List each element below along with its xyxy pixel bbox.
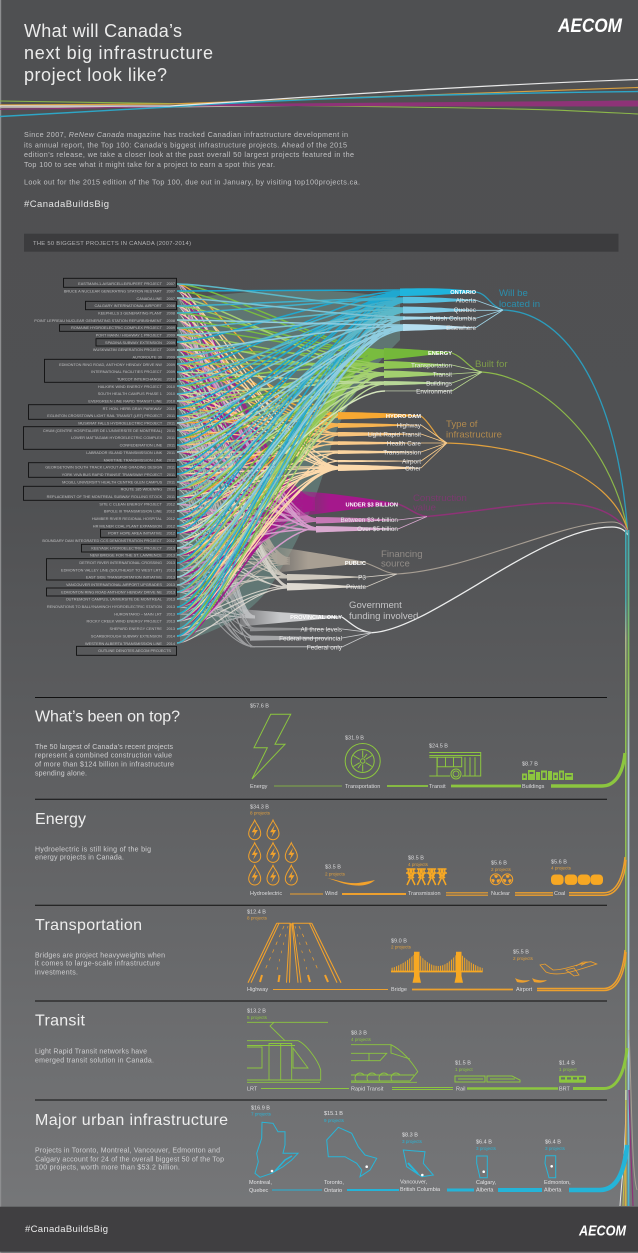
value labels [249, 1105, 571, 1194]
project list: SITE C CLEAN ENERGY PROJECT 2012 [99, 502, 175, 506]
value labels: Ontario [324, 1188, 342, 1194]
value labels: $13.2 B [247, 1009, 266, 1015]
value labels: Bridge [391, 987, 407, 993]
right edge bundle of lines [620, 530, 637, 1206]
value labels: $16.9 B [251, 1105, 270, 1111]
flow labels: ENERGY [428, 351, 452, 357]
project counts: 2 projects [391, 945, 412, 950]
panel: what's been on top [35, 704, 625, 790]
value labels: $6.4 B [476, 1139, 492, 1145]
description: 100 projects, worth more than $53.2 billion. [35, 1165, 180, 1172]
heading: Transit [35, 1013, 86, 1030]
flow category headings: source [381, 558, 410, 570]
logo: AECOM: AECOM [557, 15, 623, 37]
project list: EASTMAIN-1-A/SARCELLE/RUPERT PROJECT 2007 [78, 282, 175, 286]
panel: energy [35, 805, 626, 897]
value labels: Buildings [522, 784, 545, 790]
flow labels: PUBLIC [345, 561, 366, 567]
value labels: Quebec [249, 1188, 269, 1194]
description: investments. [35, 969, 78, 976]
description: Light Rapid Transit networks have [35, 1048, 147, 1055]
hub connector lines to the right edge [342, 292, 628, 647]
value labels: Alberta [544, 1188, 562, 1194]
value labels: $8.3 B [351, 1031, 367, 1037]
icon: BRT bus [559, 1076, 586, 1083]
title: project look like? [24, 65, 167, 85]
value labels: $3.5 B [325, 865, 341, 871]
project list: EDMONTON RING ROAD ANTHONY HENDAY DRIVE NE 2013 [61, 590, 175, 594]
project list: SOUTH HEALTH CAMPUS PHASE 1 2010 [98, 392, 175, 396]
mesh of flow lines: location (blue) [177, 284, 405, 643]
footer hashtag: #CanadaBuildsBig [25, 1224, 108, 1235]
flow category headings: Will be [499, 288, 528, 299]
value labels [250, 805, 567, 897]
value labels: $15.1 B [324, 1111, 343, 1117]
mesh of flow lines: built for (green) [177, 284, 385, 643]
project list: AUTOROUTE 30 2009 [133, 356, 175, 360]
project counts: 3 projects [545, 1146, 566, 1151]
project list: CHUM (CENTRE HOSPITALIER DE L’UNIVERSITE DE MONTREAL) 2011 [43, 429, 175, 433]
title: next big infrastructure [24, 43, 213, 63]
flow ribbons: financing source [277, 547, 366, 590]
value labels: $6.4 B [545, 1139, 561, 1145]
project counts: 9 projects [324, 1118, 345, 1123]
intro paragraph: edition’s release, we take a closer look at the past overall 50 largest projects featured in the [24, 150, 354, 159]
description [35, 1147, 224, 1172]
flow category headings: Financing [381, 549, 423, 560]
project counts [250, 811, 572, 876]
project list: WESTERN ALBERTA TRANSMISSION LINE 2014 [85, 642, 176, 646]
description [35, 952, 165, 976]
value labels: $9.0 B [391, 939, 407, 945]
value labels: $5.6 B [491, 861, 507, 867]
flow category headings: Government [349, 600, 402, 611]
project list: KEEPHILLS 3 GENERATING PLANT 2008 [98, 311, 175, 315]
project list: HUMBER RIVER REGIONAL HOSPITAL 2012 [92, 517, 175, 521]
value labels: $12.4 B [247, 910, 266, 916]
project list: MUSKRAT FALLS HYDROELECTRIC PROJECT 2011 [78, 422, 175, 426]
value labels: Wind [325, 891, 338, 897]
value labels: $34.3 B [250, 805, 269, 811]
flow category headings: funding involved [349, 611, 418, 622]
project list: ROMAINE HYDROELECTRIC COMPLEX PROJECT 2009 [71, 326, 175, 330]
title [24, 21, 213, 85]
icon: transmission towers [406, 869, 447, 885]
intro paragraph [24, 130, 360, 186]
project list: RT. HON. HERB GRAY PARKWAY 2010 [103, 407, 175, 411]
description: Hydroelectric is still king of the big [35, 847, 151, 854]
value labels: $8.3 B [402, 1132, 418, 1138]
value labels: $1.4 B [559, 1061, 575, 1067]
description: Calgary account for 24 of the overall biggest 50 of the Top [35, 1156, 224, 1163]
value labels: $8.5 B [408, 855, 424, 861]
heading: What’s been on top? [35, 709, 180, 726]
flow labels: Private [346, 584, 366, 591]
icon: wind swoosh [327, 878, 375, 886]
value labels: $5.6 B [551, 859, 567, 865]
project list: LABRADOR ISLAND TRANSMISSION LINK 2011 [86, 451, 175, 455]
project list: CONFEDERATION LINE 2011 [120, 444, 175, 448]
heading: Transportation [35, 917, 142, 934]
description: of more than $124 billion in infrastructure [35, 761, 174, 768]
intro paragraph: Since 2007, ReNew Canada magazine has tracked Canadian infrastructure development in [24, 130, 348, 139]
project list: HURONTARIO – MAIN LRT 2013 [114, 612, 175, 616]
icon: rail train [455, 1076, 520, 1082]
project list: HR MILNER COAL PLANT EXPANSION 2012 [93, 524, 175, 528]
project counts: 8 projects [247, 916, 268, 921]
value labels: Calgary, [476, 1180, 497, 1186]
flow labels: Transmission [383, 450, 421, 456]
map: Quebec [255, 1122, 298, 1177]
project list: EGLINTON CROSSTOWN LIGHT RAIL TRANSIT (LRT) PROJECT 2011 [47, 414, 175, 418]
mesh of flow lines: government funding (grey) [177, 284, 255, 647]
description: Bridges are project heavyweights when [35, 952, 165, 959]
project list: PORT MANN / HIGHWAY 1 PROJECT 2009 [96, 334, 175, 338]
project list: BRUCE A NUCLEAR GENERATING STATION RESTART 2007 [64, 289, 175, 293]
value labels: $31.9 B [345, 736, 364, 742]
value labels: Toronto, [324, 1180, 344, 1186]
flow labels: Health Care [387, 440, 421, 448]
description: spending alone. [35, 771, 87, 778]
value labels [247, 910, 533, 993]
panel: major urban infrastructure [35, 1105, 627, 1194]
value labels [250, 704, 545, 790]
project counts [247, 916, 534, 961]
flow category headings: Type of [446, 419, 478, 430]
map: British Columbia [403, 1150, 433, 1177]
value labels: $1.5 B [455, 1061, 471, 1067]
value labels: BRT [559, 1086, 571, 1092]
project list: SPADINA SUBWAY EXTENSION 2009 [105, 341, 175, 345]
intro paragraph: Look out for the 2015 edition of the Top 100, due out in January, by visiting top100projects.ca. [24, 178, 360, 186]
intro paragraph: Top 100 to see what it might take for a project to earn a spot this year. [24, 160, 275, 169]
flow labels: ONTARIO [450, 290, 477, 296]
flow labels: Alberta [456, 298, 476, 304]
flow line: highway to airport [273, 950, 626, 990]
flow labels: Transportation [411, 362, 452, 370]
project counts: 2 projects [325, 871, 346, 876]
project list: ROCKY CREEK WIND ENERGY PROJECT 2013 [86, 620, 175, 624]
description: emerged transit solution in Canada. [35, 1057, 154, 1064]
flow line: energy to buildings [274, 753, 625, 786]
description: represent a combined construction value [35, 753, 172, 760]
project list: PORT HOPE AREA INITIATIVE 2012 [108, 532, 175, 536]
map: Alberta, Edmonton [545, 1156, 556, 1178]
project list: OUTREMONT CAMPUS, UNIVERSITE DE MONTREAL 2013 [66, 598, 175, 602]
flow category headings [349, 288, 540, 622]
title: What will Canada’s [24, 21, 182, 41]
flow labels: HYDRO DAM [386, 414, 421, 420]
project list: CALGARY INTERNATIONAL AIRPORT 2008 [94, 304, 175, 308]
value labels: Rail [456, 1086, 465, 1092]
mesh backing tint under the flow lines [178, 291, 400, 642]
value labels: LRT [247, 1086, 258, 1092]
hashtag: #CanadaBuildsBig [24, 199, 109, 210]
project list: EDMONTON RING ROAD, ANTHONY HENDAY DRIVE NW 2009 [59, 363, 175, 367]
icon: lightning bolt [252, 714, 291, 779]
flow category headings: located in [499, 299, 540, 310]
value labels: Transportation [345, 784, 380, 790]
heading: Major urban infrastructure [35, 1112, 228, 1129]
value labels: $8.7 B [522, 762, 538, 768]
project list: WUSKWATIM GENERATION PROJECT 2009 [93, 348, 175, 352]
flow labels: All three levels [300, 626, 342, 633]
flow ribbons: government funding [240, 609, 342, 647]
icon: bus [429, 752, 481, 779]
icon: nuclear symbols [490, 874, 513, 885]
description: it comes to large-scale infrastructure [35, 961, 160, 968]
project list: HALKIRK WIND ENERGY PROJECT 2010 [98, 385, 175, 389]
flow ribbons: type of infrastructure [338, 412, 421, 471]
description [35, 744, 174, 778]
header ribbons: colored lines crossing the page [0, 80, 638, 116]
description: Projects in Toronto, Montreal, Vancouver, Edmonton and [35, 1147, 220, 1154]
flow labels: P3 [358, 574, 366, 581]
mesh of flow lines: construction value (magenta) [177, 284, 318, 643]
flow ribbons: built for [384, 348, 452, 391]
flow line: Montreal to Edmonton [272, 1145, 627, 1190]
value labels: Nuclear [491, 891, 510, 897]
flow labels: Other [405, 466, 422, 472]
project list: EAST SIDE TRANSPORTATION INITIATIVE 2013 [86, 576, 175, 580]
value labels: Edmonton, [544, 1180, 571, 1186]
project list: BOUNDARY DAM INTEGRATED CCS DEMONSTRATION PROJECT 2012 [42, 539, 175, 543]
project counts: 3 projects [476, 1146, 497, 1151]
icon: coal lumps [551, 874, 603, 885]
project counts: 4 projects [351, 1037, 372, 1042]
flow labels: Airport [402, 458, 421, 466]
icon: highway [248, 923, 341, 983]
value labels: Vancouver, [400, 1179, 428, 1185]
value labels: Energy [250, 784, 268, 790]
project list: DETROIT RIVER INTERNATIONAL CROSSING 2013 [79, 561, 175, 565]
flow labels: Quebec [454, 307, 477, 314]
flow labels: Over $5 billion [357, 526, 398, 533]
value labels: Coal [554, 891, 565, 897]
flow labels: Highway [396, 422, 422, 430]
project list: BIPOLE III TRANSMISSION LINE 2012 [104, 510, 175, 514]
project counts [251, 1112, 566, 1151]
project list: REPLACEMENT OF THE MONTREAL SUBWAY ROLLING STOCK 2011 [47, 495, 175, 499]
project list: OUTLINE DENOTES AECOM PROJECTS [98, 649, 171, 653]
footer bar [0, 1207, 638, 1252]
flow labels: Light Rapid Transit [368, 432, 421, 438]
project counts: 1 project [559, 1067, 577, 1072]
project counts: 5 projects [247, 1015, 268, 1020]
icon: airplanes [515, 962, 597, 983]
icon: LRT train [247, 1022, 328, 1082]
value labels: Airport [516, 987, 533, 993]
footer logo: AECOM: AECOM [578, 1222, 626, 1240]
value labels: Transit [429, 784, 446, 790]
icon: water drops [249, 820, 297, 885]
section bar: the 50 biggest projects [24, 234, 618, 252]
mesh of flow lines: type of infrastructure (orange) [177, 284, 340, 643]
flow labels: Federal only [307, 644, 343, 651]
description: The 50 largest of Canada’s recent projects [35, 744, 174, 751]
panel: transit [35, 1009, 627, 1092]
project counts: 7 projects [251, 1112, 272, 1116]
map: Alberta, Calgary [477, 1156, 487, 1178]
project list: NEW BRIDGE FOR THE ST. LAWRENCE 2013 [90, 554, 175, 558]
project list: INTERNATIONAL FACILITIES PROJECT 2009 [91, 370, 175, 374]
intro paragraph: its annual report, the Top 100: Canada’s biggest infrastructure projects. Ahead of the 2015 [24, 140, 347, 149]
project list: RENOVATIONS TO BALLYNAHINCH HYDROELECTRIC STATION 2013 [47, 605, 175, 609]
flow labels: Between $3-4 billion [340, 517, 398, 524]
value labels: Rapid Transit [351, 1086, 384, 1092]
project counts: 4 projects [551, 866, 572, 871]
project counts: 3 projects [402, 1139, 423, 1144]
project list: EVERGREEN LINE RAPID TRANSIT LINE 2010 [88, 400, 175, 404]
flow labels: Elsewhere [446, 325, 476, 332]
flow category headings: Construction [413, 493, 467, 504]
project list: POINT LEPREAU NUCLEAR GENERATING STATION REFURBISHMENT 2008 [34, 319, 175, 323]
heading: Energy [35, 811, 86, 828]
project list: ROUTE 185 WIDENING 2011 [121, 488, 175, 492]
value labels: Hydroelectric [250, 891, 282, 897]
icon: rapid transit train [351, 1045, 418, 1082]
project list: KEEYASK HYDROELECTRIC PROJECT 2013 [91, 546, 175, 550]
project list: SCARBOROUGH SUBWAY EXTENSION 2014 [91, 634, 176, 638]
project counts [247, 1015, 577, 1072]
icon: tire [345, 744, 380, 778]
icon: buildings [522, 770, 573, 780]
flow category headings: Built for [475, 359, 508, 370]
project counts: 2 projects [513, 956, 534, 961]
project list: LOWER MATTAGAMI HYDROELECTRIC COMPLEX 2011 [71, 436, 175, 440]
outline boxes marking AECOM projects [24, 278, 176, 655]
description [35, 847, 151, 862]
flow labels: UNDER $3 BILLION [346, 502, 398, 508]
value labels: Highway [247, 987, 268, 993]
value labels: British Columbia [400, 1187, 441, 1193]
project list: VANCOUVER INTERNATIONAL AIRPORT UPGRADES 2013 [66, 583, 175, 587]
description: energy projects in Canada. [35, 855, 124, 862]
value labels: $24.5 B [429, 744, 448, 750]
project list: MCGILL UNIVERSITY HEALTH CENTRE GLEN CAMPUS 2011 [62, 480, 175, 484]
flow line: LRT to BRT [261, 1048, 627, 1090]
project list: MARITIME TRANSMISSION LINK 2011 [104, 458, 175, 462]
icon: suspension bridge [391, 952, 483, 983]
flow line: hydroelectric to coal [290, 857, 626, 895]
panel: transportation [35, 910, 626, 993]
value labels: Transmission [408, 891, 440, 897]
section rules [35, 698, 607, 1100]
project list: SHEPARD ENERGY CENTRE 2013 [110, 627, 175, 631]
flow labels: Transit [433, 372, 452, 378]
flow ribbons: construction value [300, 491, 398, 532]
project list: EDMONTON VALLEY LINE (SOUTHEAST TO WEST LRT) 2013 [61, 568, 175, 572]
flow labels: Federal and provincial [279, 635, 342, 642]
value labels: $5.5 B [513, 950, 529, 956]
project list: YORK VIVA BUS RAPID TRANSIT TRANSWAY PROJECT 2011 [62, 473, 175, 477]
project counts: 4 projects [408, 862, 429, 867]
project list: TURCOT INTERCHANGE 2010 [117, 378, 175, 382]
flow ribbons: location [400, 288, 476, 331]
flow category headings: value [413, 502, 436, 514]
value labels: Alberta [476, 1188, 494, 1194]
project list: GEORGETOWN SOUTH TRACK LAYOUT AND GRADING DESIGN 2011 [45, 466, 175, 470]
mesh of flow lines: financing source (tan) [177, 284, 290, 643]
flow labels: Environment [416, 388, 452, 396]
flow category headings: infrastructure [446, 430, 502, 440]
section bar: the 50 biggest projects: THE 50 BIGGEST PROJECTS IN CANADA (2007-2014) [33, 241, 191, 247]
project list: CANADA LINE 2007 [137, 297, 175, 301]
value labels: Montreal, [249, 1180, 272, 1186]
map: Ontario [327, 1127, 377, 1177]
project counts: 1 project [455, 1067, 473, 1072]
flow labels: PROVINCIAL ONLY [290, 615, 342, 621]
project counts: 8 projects [250, 811, 271, 816]
flow labels: Buildings [426, 380, 452, 388]
value labels: $57.6 B [250, 704, 269, 710]
description [35, 1048, 154, 1064]
project counts: 2 projects [491, 867, 512, 872]
value labels [247, 1009, 575, 1092]
flow labels: British Columbia [429, 316, 476, 322]
project list [34, 282, 176, 653]
flow labels [279, 290, 477, 651]
